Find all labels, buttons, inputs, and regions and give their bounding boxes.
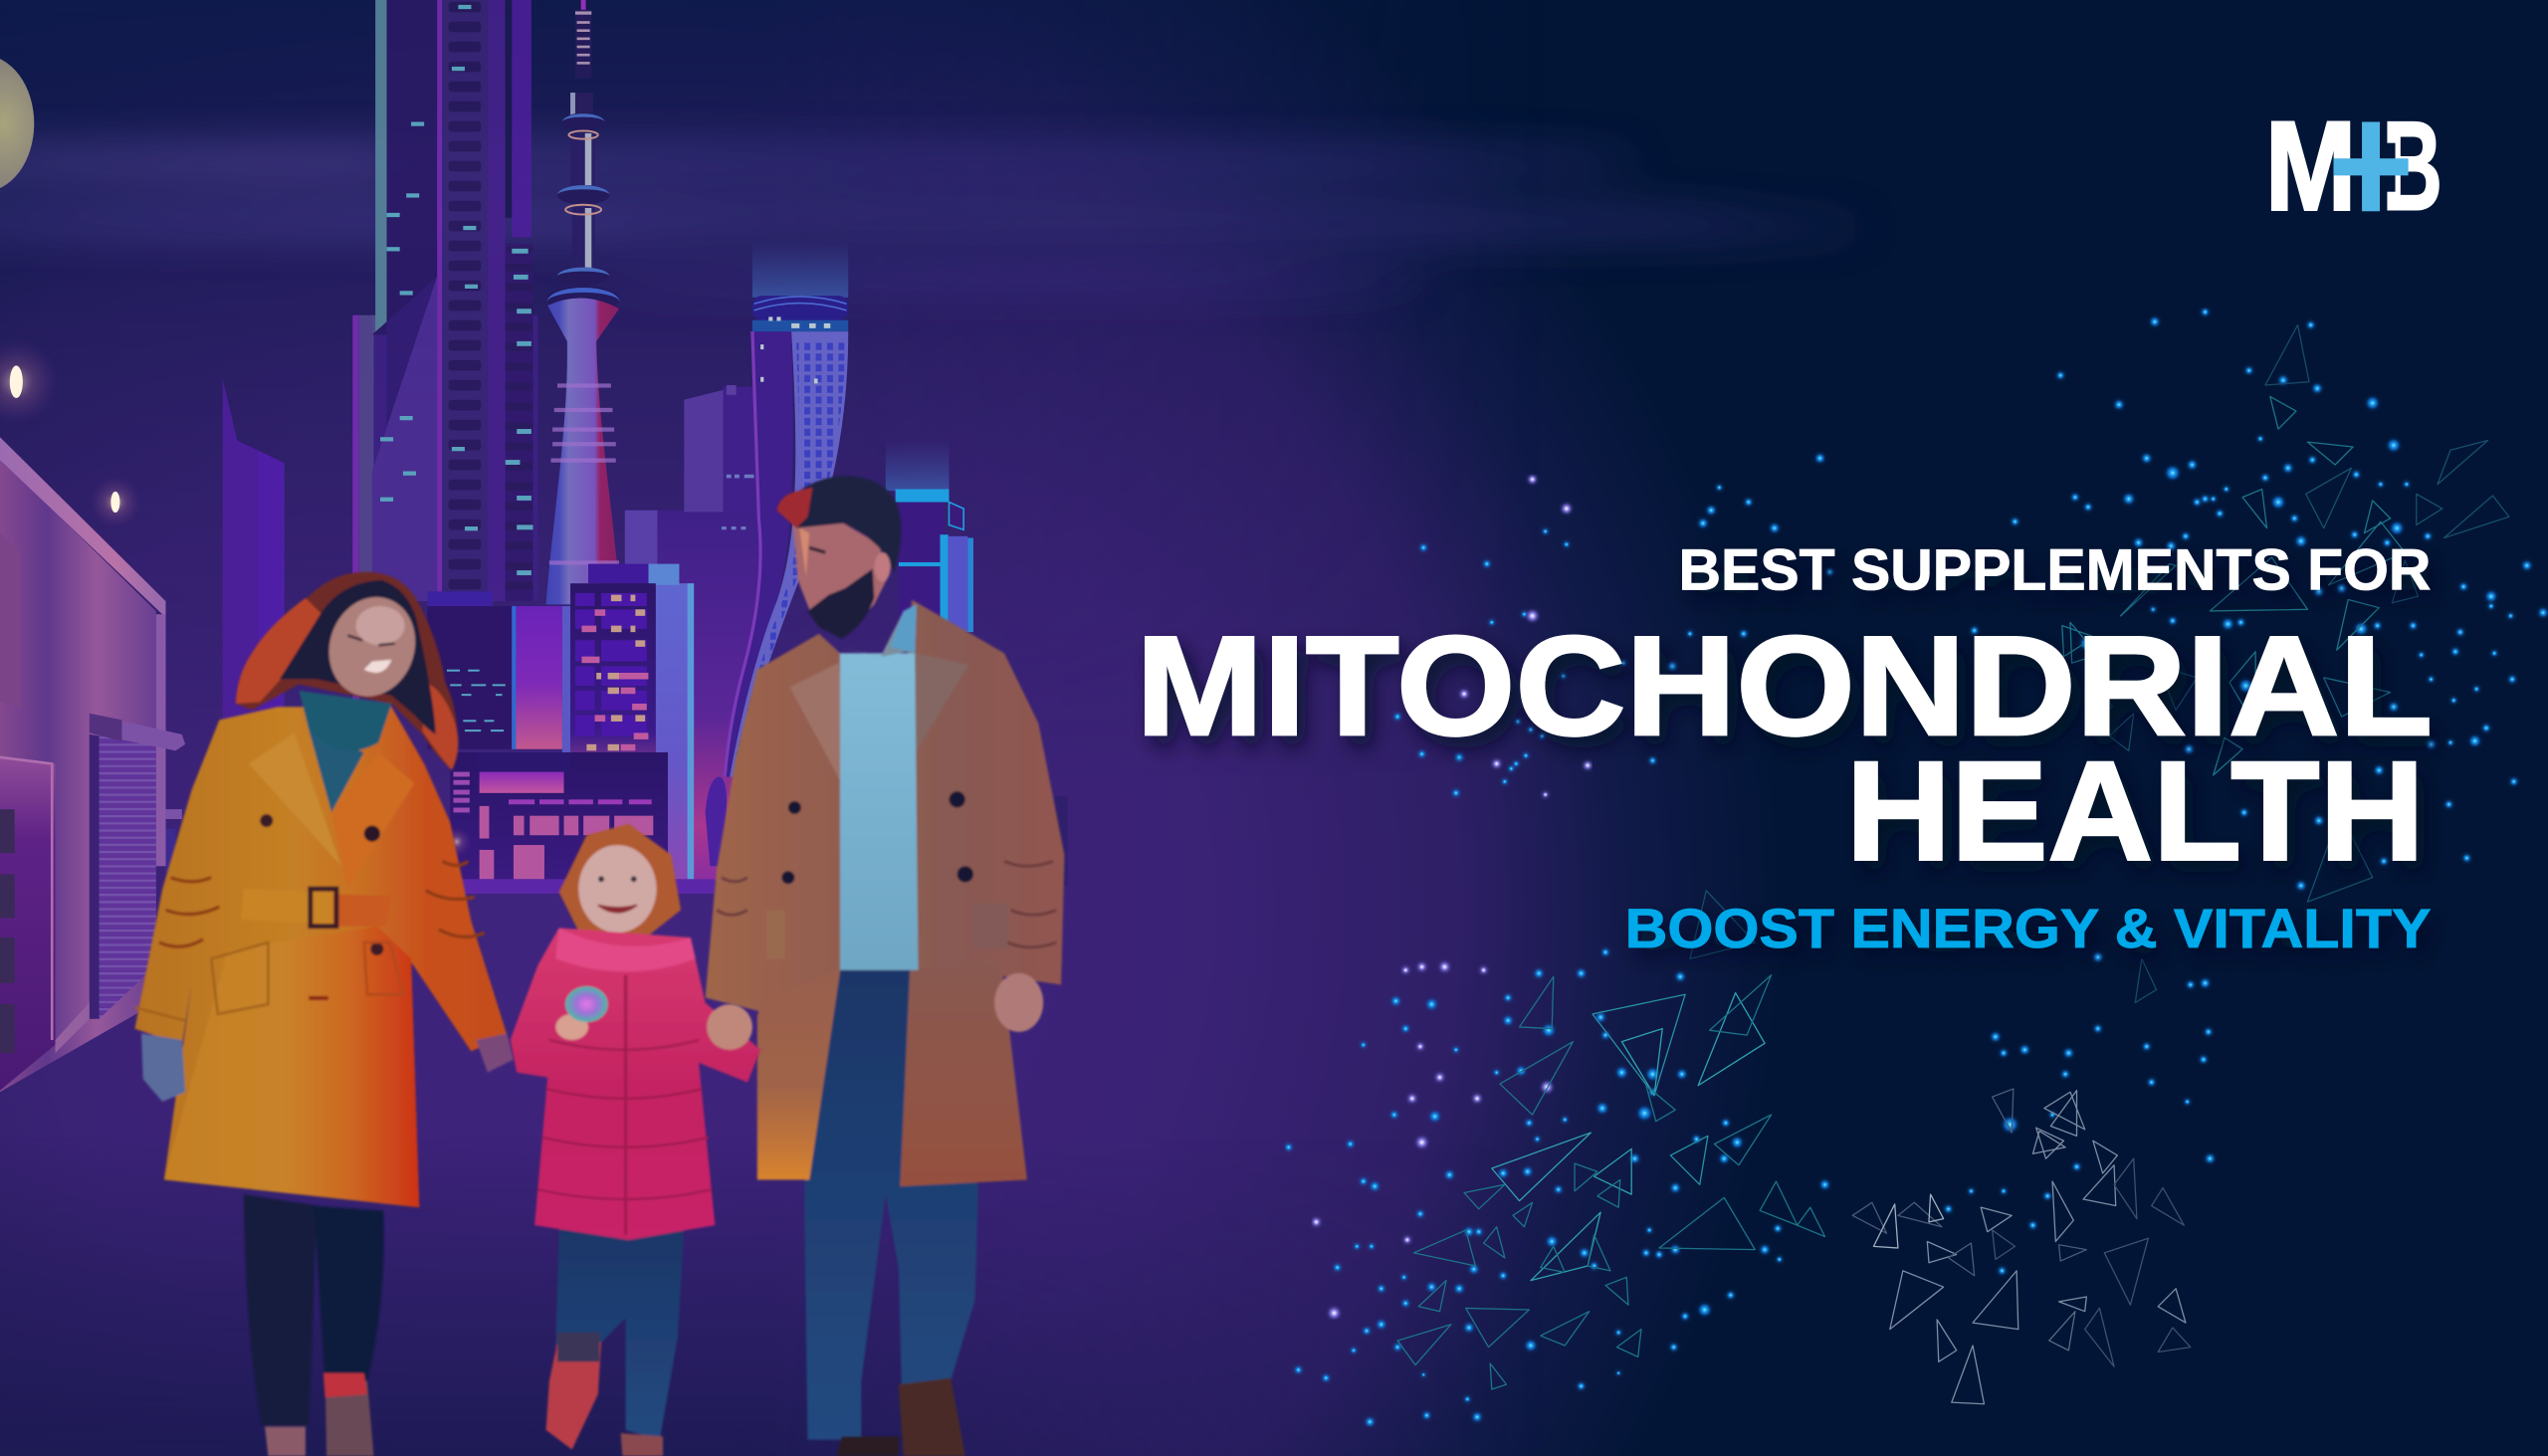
woman: scarf and sweater: [299, 691, 391, 812]
man: shirt collar: [837, 604, 917, 657]
girl: hand and glowing ball: [555, 986, 608, 1040]
girl: jeans: [555, 1227, 684, 1440]
joined hands: [707, 1004, 752, 1050]
eyebrow text: BEST SUPPLEMENTS FOR: [1679, 539, 2431, 603]
man: right hand: [994, 973, 1043, 1032]
girl: jacket: [511, 928, 760, 1240]
title line one: MITOCHONDRIAL: [1136, 607, 2433, 765]
woman: coat: [135, 707, 507, 1207]
particle field: blue dots: [1285, 308, 2548, 1427]
background gradient: [0, 0, 1718, 1456]
particle field: violet dots: [1312, 475, 1592, 1320]
moon: [0, 56, 34, 192]
street lamps: [0, 339, 141, 528]
girl in pink jacket: [511, 824, 760, 1456]
woman: face: [317, 586, 428, 708]
title line two: HEALTH: [1846, 732, 2425, 891]
particle field: white triangles: [1852, 1089, 2191, 1404]
man in brown coat: [706, 476, 1064, 1456]
man: jeans: [804, 968, 978, 1440]
logo: [2265, 96, 2442, 237]
woman: red curls: [236, 598, 458, 770]
woman in orange coat: [135, 572, 514, 1456]
girl: face: [578, 845, 657, 933]
twisted tower: [725, 239, 848, 776]
girl: hair: [559, 824, 681, 935]
windowed office building: [570, 564, 694, 879]
distant violet tower: [223, 378, 285, 812]
broadcast tower: [546, 0, 621, 604]
man: head: [776, 476, 901, 639]
man: shoes: [837, 1378, 965, 1456]
background block and office tower: [625, 385, 763, 881]
woman: dark hair core: [280, 580, 436, 734]
cyan building behind man: [886, 439, 1068, 886]
girl: shoes: [546, 1333, 663, 1456]
particle field: teal triangles: [1397, 325, 2509, 1389]
main skyscraper: [352, 0, 537, 706]
sky light streaks: [0, 146, 1869, 291]
woman: hands: [141, 1033, 514, 1102]
logo: B: [2382, 96, 2442, 237]
man: sweater: [840, 653, 918, 970]
logo: M: [2265, 96, 2356, 237]
low-rise podium: [442, 752, 727, 894]
woman: hair: [236, 572, 457, 770]
mid-rise purple block: [427, 591, 570, 760]
left street building: [0, 437, 185, 1092]
woman: legs: [244, 1194, 384, 1456]
tagline: BOOST ENERGY & VITALITY: [1625, 898, 2431, 959]
man: sleeve and body coat: [706, 600, 1064, 1186]
heading block: [1136, 539, 2433, 959]
